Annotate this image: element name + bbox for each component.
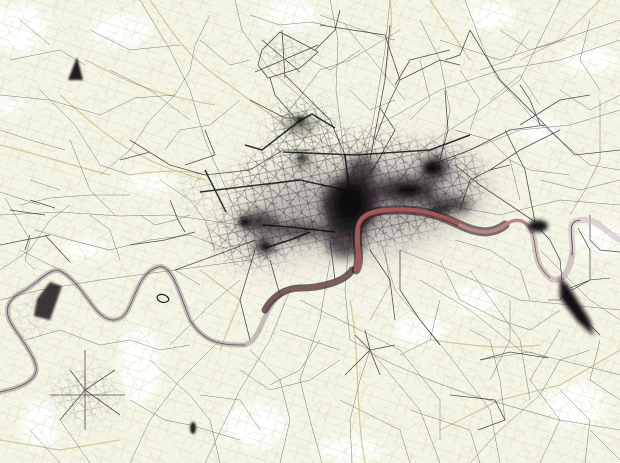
dense mesh: central street grid	[10, 28, 495, 426]
river Thames: central red reach	[356, 210, 620, 280]
density: crisp dark core	[240, 117, 449, 250]
hotspot: north west cluster	[68, 57, 83, 80]
hotspot: Canary Wharf area	[528, 220, 548, 232]
river Thames: west bends	[0, 267, 352, 392]
hotspot: Greenwich	[535, 224, 610, 336]
hotspot: Kew Gardens wedge	[34, 282, 62, 320]
central density haze	[227, 162, 480, 252]
small dark spot south	[190, 422, 196, 434]
small park ring	[157, 294, 169, 302]
density: central London dark mass	[238, 117, 472, 258]
main roads: heavy dark traces	[200, 114, 470, 248]
